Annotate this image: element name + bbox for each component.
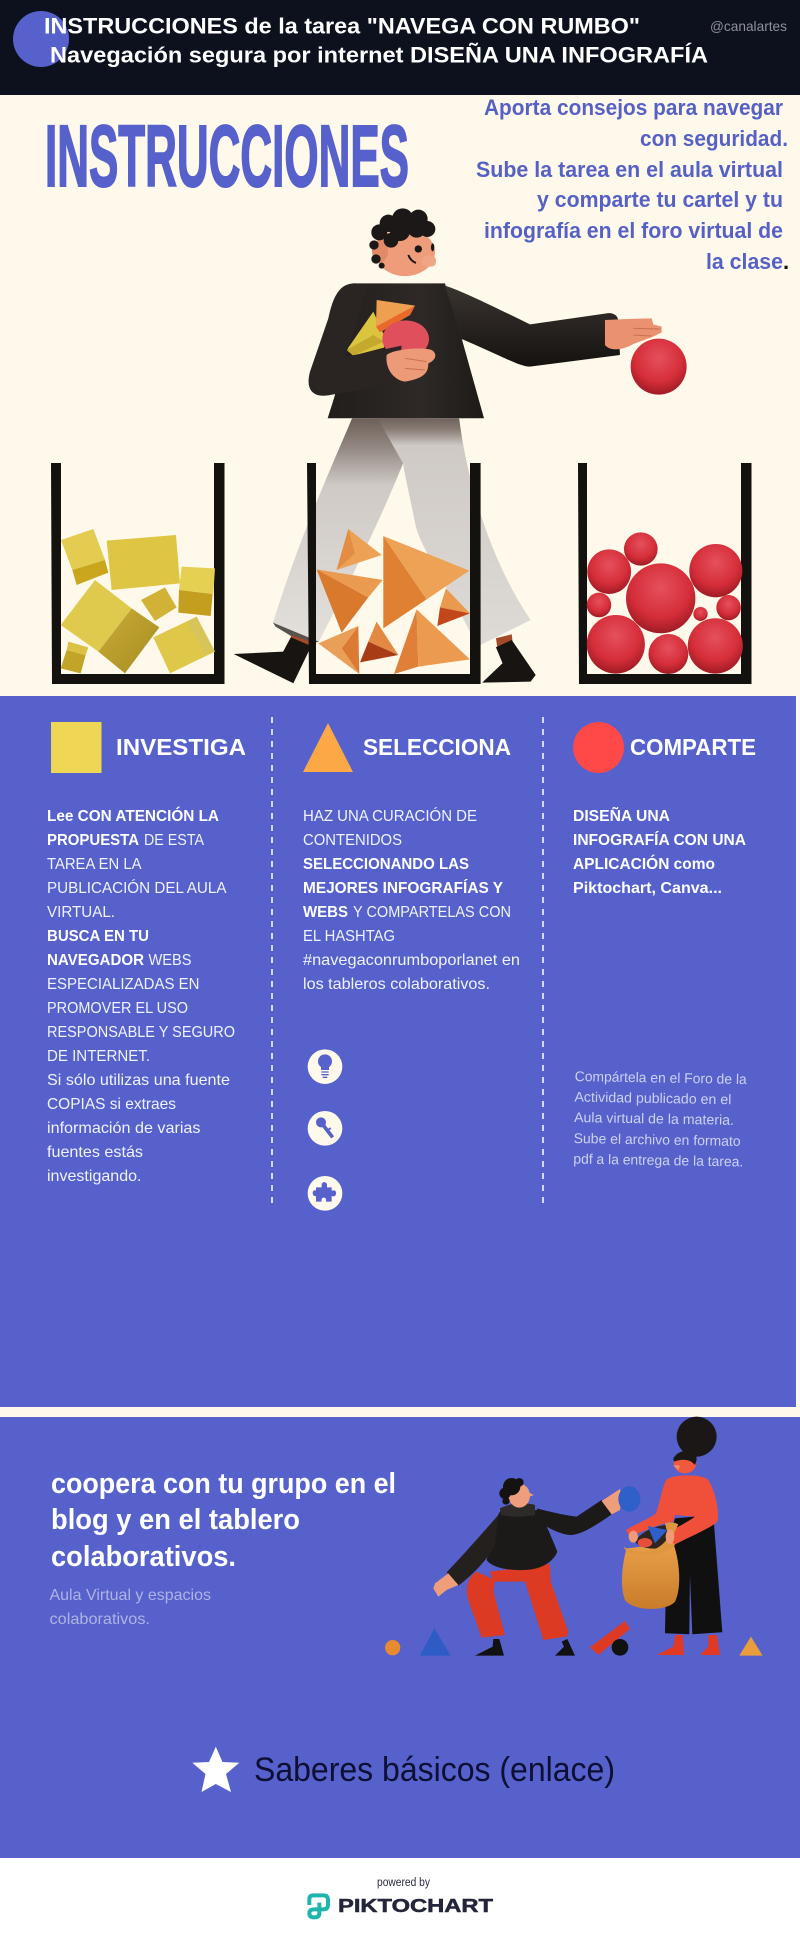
icon: puzzle [308,1176,342,1211]
text: aula virtual [50,1587,211,1628]
heading: coopera [51,1468,396,1573]
text: comparte: DISEÑA UNA [573,805,670,825]
illustration: trousers [273,418,531,647]
heading: selecciona: SELECCIONA [363,734,511,760]
heading: coopera: colaborativos. [51,1541,236,1573]
header bar [0,0,800,95]
hand right [605,318,662,349]
text: selecciona: los tableros colaborativos. [303,976,490,993]
icon: lightbulb [308,1049,342,1084]
column dividers [272,717,543,1203]
text: foro note [573,1068,747,1169]
text: comparte: APLICACIÓN como [573,854,715,873]
column: investiga [47,722,246,1185]
illustration: shoes [234,623,536,683]
logo wordmark: PIKTOCHART [338,1896,493,1916]
text: selecciona: Y COMPARTELAS CON [353,904,511,921]
text: investiga: NAVEGADOR [47,952,144,969]
cubes [61,529,215,673]
text: investiga: COPIAS si extraes [47,1096,176,1113]
text: investiga: investigando. [47,1168,142,1185]
hand left [386,348,435,382]
box frame [51,463,224,684]
powered by: powered by [377,1877,430,1889]
instructions text block: y comparte tu cartel y tu [537,187,783,212]
instructions text block: . [783,249,789,274]
text: selecciona: SELECCIONANDO LAS [303,856,469,873]
text: investiga: PROPUESTA [47,832,139,849]
heading: comparte: COMPARTE [630,734,756,760]
text: investiga: TAREA EN LA [47,856,142,873]
text: selecciona: WEBS [303,904,348,921]
text: foro note: Compártela en el Foro de la [575,1068,747,1087]
text: investiga: Si sólo utilizas una fuente [47,1072,230,1089]
black ball small [612,1639,628,1656]
text: comparte [573,805,746,897]
text: foro note: Sube el archivo en formato [574,1130,741,1149]
text: investiga: fuentes estás [47,1144,143,1161]
text: foro note: Aula virtual de la materia. [574,1109,734,1128]
background: cream section [0,95,800,1417]
link: saberes basicos: Saberes básicos (enlace) [254,1751,615,1789]
extended arm [445,286,620,367]
header title: INSTRUCCIONES de la tarea "NAVEGA CON RUMBO" [44,14,640,38]
orange ball [385,1640,400,1655]
box frame [578,463,752,684]
heading: investiga: INVESTIGA [116,734,246,760]
text: foro note: pdf a la entrega de la tarea. [573,1150,743,1169]
spheres [587,532,743,674]
man [433,1478,622,1656]
panel: three steps [0,696,796,1407]
text: investiga: DE INTERNET. [47,1048,150,1065]
icon: red circle [573,722,624,773]
text: investiga: ESPECIALIZADAS EN [47,976,200,993]
text: comparte: INFOGRAFÍA CON UNA [573,830,746,849]
text: selecciona: #navegaconrumboporlanet en [303,952,520,969]
header handle: @canalartes [710,18,787,34]
illustration: two people with shapes [385,1417,763,1656]
big heading: INSTRUCCIONES [45,108,409,205]
black ball [677,1417,717,1457]
box: red spheres [578,463,752,684]
pyramids [317,529,470,674]
instructions text block: la clase [706,249,783,274]
text: selecciona: EL HASHTAG [303,928,395,945]
text: comparte: Piktochart, Canva... [573,880,722,897]
held shapes [347,300,429,358]
text: investiga: WEBS [148,952,192,969]
ball [631,339,687,395]
text: investiga [47,806,235,1185]
orange triangle [739,1637,763,1656]
text: selecciona: CONTENIDOS [303,832,402,849]
instructions text block: con seguridad. [640,126,788,151]
box frame [307,463,481,684]
sack [622,1522,679,1609]
bent arm [309,283,402,396]
instructions text block [476,95,789,274]
column: selecciona [303,723,520,1211]
woman [626,1451,722,1655]
text: foro note: Actividad publicado en el [574,1089,732,1107]
logo mark [309,1895,328,1917]
panel: coopera [0,1417,800,1858]
instructions text block: infografía en el foro virtual de [484,218,783,243]
text: selecciona [303,806,520,993]
text: investiga: PROMOVER EL USO [47,1000,188,1017]
text: aula virtual: Aula Virtual y espacios [50,1587,211,1604]
text: investiga: PUBLICACIÓN DEL AULA [47,878,227,897]
icon: star [192,1747,239,1792]
instructions text block: Aporta consejos para navegar [484,95,783,120]
text: investiga: Lee CON ATENCIÓN LA [47,806,219,825]
text: selecciona: HAZ UNA CURACIÓN DE [303,806,477,825]
icon: yellow square [51,722,102,773]
text: investiga: información de varias [47,1120,200,1137]
footer: piktochart credit [309,1877,493,1917]
instructions text block: Sube la tarea en el aula virtual [476,157,783,182]
header title: Navegación segura por internet DISEÑA UNA INFOGRAFÍA [50,42,708,68]
text: selecciona: MEJORES INFOGRAFÍAS Y [303,878,503,897]
text: investiga: BUSCA EN TU [47,928,149,945]
text: aula virtual: colaborativos. [50,1611,150,1628]
illustration: man upper body [309,208,687,418]
box: orange pyramids [307,463,481,684]
heading: coopera: coopera con tu grupo en el [51,1468,396,1500]
text: investiga: DE ESTA [144,832,204,849]
icons: bulb, key, puzzle [308,1049,342,1211]
icon: orange triangle [303,723,353,772]
heading: coopera: blog y en el tablero [51,1504,300,1536]
text: investiga: VIRTUAL. [47,904,115,921]
icon: header circle [13,11,69,67]
torso [328,283,484,418]
blue triangle [420,1628,451,1656]
icon: key [308,1111,342,1146]
text: investiga: RESPONSABLE Y SEGURO [47,1024,235,1041]
blue ball [618,1486,640,1512]
header title [44,14,708,68]
head [369,208,436,276]
box: yellow cubes [51,463,224,684]
red bar [590,1621,630,1655]
column: comparte [573,722,756,1169]
